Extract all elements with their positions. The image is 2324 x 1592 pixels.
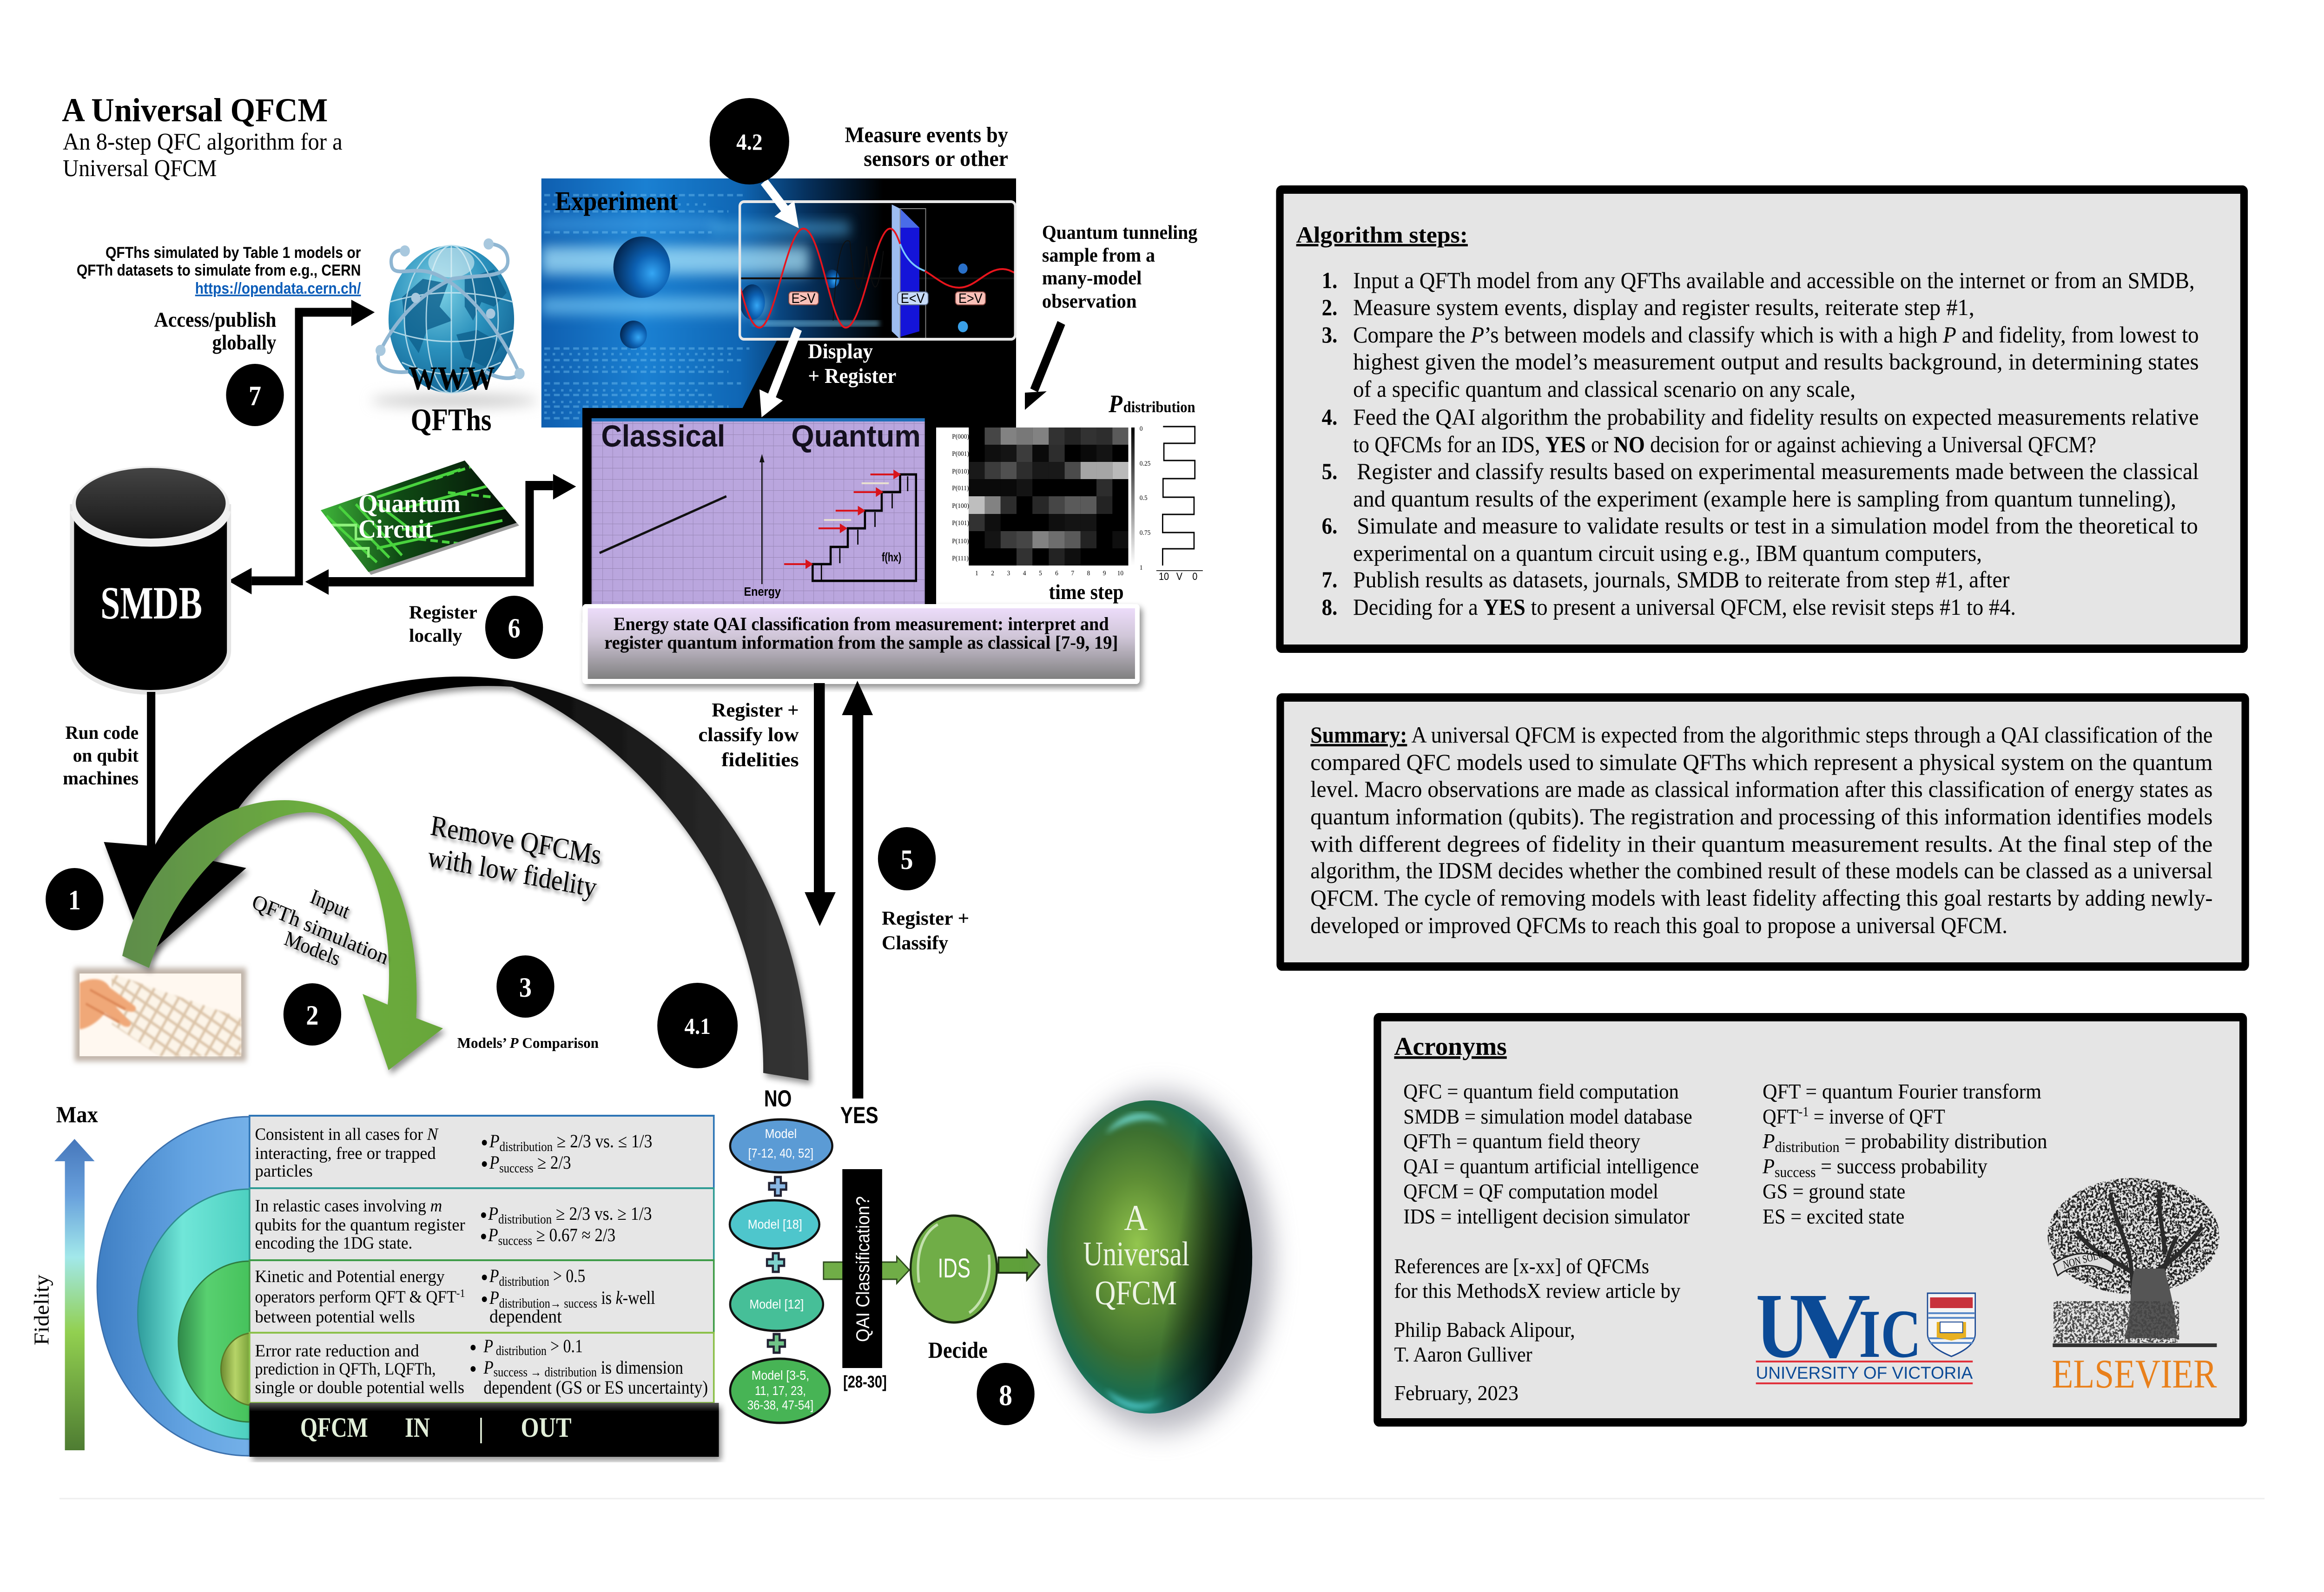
logo: UVic: U (1756, 1274, 1809, 1377)
table row: kinetic and potential energy (250, 1260, 714, 1333)
heatmap: P distribution over time step: 3 (1007, 569, 1010, 577)
curved arrow: input QFTh simulation models (122, 800, 443, 1070)
step badge 4.1 (657, 983, 738, 1068)
rotated label: remove QFCMs with low fidelity: Remove QFCMs (429, 809, 604, 871)
panel: summary: algorithm, the IDSM decides whether the combined result of these models can be classed as a universal (1310, 858, 2212, 884)
table footer: QFCM in out: QFCM (300, 1412, 368, 1443)
references and authors (1394, 1255, 1681, 1405)
table row: kinetic and potential energy: > 0.5 (549, 1266, 585, 1286)
label: register + classify (882, 907, 969, 954)
label: run code on qubit machines: Run code (66, 723, 139, 743)
banner: energy state QAI classification: register quantum information from the sample as classical [7-9, 19] (604, 632, 1118, 653)
acronym list, right column: P (1762, 1155, 1775, 1178)
rotated label: input QFTh simulation models: QFTh simulation (249, 890, 391, 969)
panel: classical vs quantum energy chart: Quantum (791, 419, 921, 454)
acronym list, right column: QFT = quantum Fourier transform (1763, 1080, 2041, 1104)
label: measure events: Measure events by (845, 122, 1008, 147)
heatmap: P distribution over time step: 0.25 (1140, 460, 1150, 467)
label: register + classify low fidelities: classify low (698, 724, 799, 745)
table row: error rate reduction: distribution (493, 1343, 547, 1358)
rotated label: remove QFCMs with low fidelity: with low fidelity (426, 840, 599, 903)
numbered list: 6. (1322, 513, 1337, 539)
chart: P distribution step plot (1108, 390, 1203, 582)
panel: summary: level. Macro observations are made as classical information after this classification of energy states as (1310, 777, 2212, 803)
table row: error rate reduction: P (483, 1336, 493, 1356)
panel: algorithm steps (1280, 190, 2244, 649)
chart: P distribution step plot: 10 (1159, 571, 1169, 582)
title block: A Universal QFCM (62, 92, 328, 129)
table row: highest fidelity: ≥ 2/3 vs. ≤ 1/3 (553, 1131, 652, 1151)
table row: kinetic and potential energy: Kinetic and Potential energy (255, 1267, 445, 1286)
table row: error rate reduction: prediction in QFTh, LQFTh, (255, 1359, 436, 1378)
icon: WWW globe (370, 238, 538, 437)
table row: realistic cases: In relastic cases involving m (255, 1196, 442, 1215)
numbered list: 8. (1322, 595, 1337, 620)
arrow: YES up to classification (842, 681, 873, 1099)
label: quantum tunneling sample: many-model (1042, 267, 1142, 289)
label: register + classify low fidelities: Register + (712, 699, 799, 721)
heatmap: P distribution over time step: 0.75 (1140, 529, 1150, 537)
label: access/publish globally: globally (212, 331, 277, 355)
table row: highest fidelity: P (489, 1131, 500, 1151)
plus icon 1 (769, 1177, 786, 1196)
acronym list, left column: QFTh = quantum field theory (1403, 1130, 1640, 1153)
step badge 4.1: 4.1 (684, 1014, 711, 1039)
table footer: QFCM in out: IN (405, 1412, 430, 1443)
label: run code on qubit machines (63, 723, 139, 789)
numbered list: Register and classify results based on experimental measurements made between the classical (1357, 459, 2199, 485)
logo: UVic: IC (1859, 1296, 1921, 1372)
box: QAI classification (842, 1169, 882, 1368)
panel: acronyms and credits: Acronyms (1394, 1033, 1507, 1061)
QFTh data source note: QFTh datasets to simulate from e.g., CERN (77, 262, 361, 279)
table row: realistic cases: ≥ 0.67 ≈ 2/3 (532, 1225, 615, 1245)
model node 3: Model [12] (749, 1297, 804, 1311)
step badge 5 (878, 827, 936, 890)
label: access/publish globally (154, 308, 277, 355)
logo: UVic: UNIVERSITY OF VICTORIA (1756, 1363, 1973, 1382)
tunneling barrier diagram: E>V (792, 291, 815, 306)
acronym list, right column (1762, 1080, 2047, 1229)
table row: highest fidelity: success (499, 1161, 533, 1175)
step badge 5: 5 (900, 844, 913, 875)
label: quantum tunneling sample: observation (1042, 290, 1137, 312)
step badge 4.2 with white arrow (710, 98, 799, 228)
panel: summary: Summary: (1310, 723, 1407, 748)
reference label: 28-30: [28-30] (843, 1373, 887, 1391)
model node 1: Model (765, 1126, 797, 1141)
heatmap: P distribution over time step: 2 (991, 569, 994, 577)
numbered list: 4. (1322, 405, 1337, 430)
table row: error rate reduction: dependent (GS or ES uncertainty) (483, 1377, 708, 1398)
heatmap: P distribution over time step: 7 (1071, 569, 1074, 577)
arrow: register and classify low fidelities (805, 683, 836, 926)
table row: realistic cases: ≥ 2/3 vs. ≥ 1/3 (552, 1204, 652, 1224)
table row: realistic cases: distribution (498, 1212, 552, 1226)
tunneling barrier diagram: E>V (958, 291, 983, 306)
table row: kinetic and potential energy: P (489, 1288, 499, 1308)
table row: kinetic and potential energy: P (489, 1266, 499, 1286)
white arrow: display to classification (759, 329, 798, 417)
chart: P distribution step plot: Pdistribution (1108, 390, 1195, 418)
acronym list, right column: -1 (1798, 1105, 1809, 1119)
disc: a universal QFCM: QFCM (1095, 1274, 1177, 1312)
heatmap: P distribution over time step: P(101) (952, 519, 969, 527)
database cylinder: SMDB: SMDB (100, 577, 202, 629)
heatmap: P distribution over time step: 8 (1087, 569, 1090, 577)
table row: highest fidelity (250, 1116, 714, 1188)
numbered list: 7. (1322, 567, 1337, 593)
icon: WWW globe: WWW (409, 360, 495, 397)
heatmap axis label: time step: time step (1049, 580, 1124, 604)
panel: classical vs quantum energy chart: Energy (744, 585, 781, 599)
arrow: tunneling sample to heatmap (1025, 323, 1061, 410)
heatmap: P distribution over time step: 0.5 (1140, 494, 1148, 502)
plus icon 3 (768, 1334, 785, 1353)
numbered list: and quantum results of the experiment (example here is sampling from quantum tunneling), (1353, 487, 2176, 512)
references and authors: for this MethodsX review article by (1394, 1279, 1681, 1303)
label: fidelity: Fidelity (31, 1275, 53, 1345)
tunneling barrier diagram: E<V (901, 291, 925, 306)
step badge 3 (496, 955, 555, 1018)
label: quantum tunneling sample (1042, 221, 1197, 312)
panel: summary: with different degrees of fidelity in their quantum measurement results. At the final step of the (1310, 832, 2212, 857)
node: IDS (911, 1216, 997, 1322)
chart: P distribution step plot: V (1176, 571, 1182, 582)
banner: energy state QAI classification: Energy state QAI classification from measurement: interpret and (614, 614, 1109, 634)
arrow: fidelity scale (54, 1139, 95, 1450)
experiment image panel: Experiment (555, 186, 678, 216)
table row: realistic cases: P (488, 1225, 498, 1245)
model node 3 (730, 1278, 823, 1331)
table row: highest fidelity: distribution (500, 1139, 553, 1154)
heatmap: P distribution over time step: 1 (1140, 564, 1143, 572)
model node 2 (730, 1200, 819, 1249)
label: measure events (845, 122, 1008, 171)
label: models P comparison: Models’ P Comparison (457, 1035, 599, 1051)
heatmap: P distribution over time step: P(011) (952, 484, 969, 492)
logo: UVic (1756, 1274, 1975, 1384)
numbered list: Compare the P’s between models and classify which is with a high P and fidelity, from lowest to (1353, 322, 2199, 348)
disc: a universal QFCM: A (1124, 1198, 1148, 1238)
acronym list, left column: SMDB = simulation model database (1403, 1105, 1692, 1129)
heatmap: P distribution over time step: 1 (975, 569, 978, 577)
table row: error rate reduction: P (483, 1357, 494, 1378)
logo: Elsevier tree and wordmark: NON SOLUS (2062, 1247, 2109, 1271)
nested half-ellipses: fidelity levels (97, 1117, 250, 1456)
label: NO: NO (764, 1086, 792, 1112)
step badge 8 (977, 1363, 1035, 1425)
label: register + classify: Classify (882, 932, 948, 954)
experiment image panel: Display (808, 340, 873, 363)
step badge 3: 3 (519, 972, 532, 1003)
acronym list, right column: ES = excited state (1763, 1205, 1904, 1229)
acronym list, right column: = success probability (1816, 1155, 1987, 1178)
table row: kinetic and potential energy: operators perform QFT & QFT (255, 1287, 448, 1306)
table row: realistic cases: success (498, 1233, 532, 1248)
step badge 8: 8 (999, 1379, 1012, 1412)
acronym list, left column (1403, 1080, 1699, 1229)
acronym list, right column: distribution (1775, 1139, 1840, 1155)
logo: Elsevier tree and wordmark: ELSEVIER (2052, 1351, 2217, 1397)
label: register + classify: Register + (882, 907, 969, 929)
panel: summary: compared QFC models used to simulate QFThs which represent a physical system on the quantum (1310, 750, 2212, 776)
box: QAI classification: QAI Classification? (852, 1196, 873, 1342)
arrow: circuit to classification panel (305, 474, 576, 595)
table row: realistic cases (250, 1188, 714, 1260)
label: register + classify low fidelities (698, 699, 799, 770)
step badge 1 (46, 868, 103, 930)
heatmap: P distribution over time step: P(010) (952, 467, 969, 475)
table row: kinetic and potential energy: -1 (456, 1287, 465, 1299)
acronym list, right column: GS = ground state (1763, 1180, 1905, 1204)
acronym list, left column: QAI = quantum artificial intelligence (1403, 1155, 1699, 1178)
acronym list, left column: QFC = quantum field computation (1403, 1080, 1679, 1104)
model node 4: 11, 17, 23, (755, 1383, 806, 1398)
table row: error rate reduction: success → distribution (494, 1365, 597, 1379)
label: YES: YES (840, 1103, 878, 1129)
logo: Elsevier tree and wordmark (2048, 1178, 2219, 1397)
label: measure events: sensors or other (864, 146, 1008, 171)
heatmap: P distribution over time step (952, 425, 1150, 577)
panel: summary: developed or improved QFCMs to reach this goal to propose a universal QFCM. (1310, 913, 2007, 939)
heatmap: P distribution over time step: P(100) (952, 502, 969, 510)
numbered list (1322, 268, 2199, 620)
panel: classical vs quantum energy chart: f(hx) (882, 551, 901, 564)
curved arrow: remove QFCMs with low fidelity (104, 677, 808, 1080)
heatmap: P distribution over time step: 5 (1039, 569, 1042, 577)
panel: classical vs quantum energy chart (582, 408, 936, 623)
banner: energy state QAI classification (582, 604, 1140, 684)
table row: kinetic and potential energy: distribution (499, 1274, 549, 1289)
panel: summary: A universal QFCM is expected from the algorithmic steps through a QAI classification of the (1411, 723, 2212, 748)
label: register locally (409, 602, 477, 646)
numbered list: Simulate and measure to validate results or test in a simulation model from the theoretical to (1357, 513, 2198, 539)
numbered list: 3. (1322, 322, 1337, 348)
table row: highest fidelity: particles (255, 1161, 313, 1180)
model node 4 (730, 1359, 830, 1423)
step badge 6 (485, 596, 543, 659)
heatmap: P distribution over time step: 0 (1140, 425, 1143, 433)
step badge 7: 7 (249, 381, 261, 412)
table row: highest fidelity: P (489, 1152, 499, 1173)
numbered list: highest given the model’s measurement output and results background, in determining states (1353, 349, 2199, 375)
numbered list: Publish results as datasets, journals, SMDB to reiterate from step #1, after (1353, 567, 2010, 593)
experiment image panel: + Register (808, 364, 896, 388)
numbered list: Measure system events, display and register results, reiterate step #1, (1353, 295, 1974, 321)
numbered list: Input a QFTh model from any QFThs available and accessible on the internet or from an SMDB, (1353, 268, 2195, 294)
title block: An 8-step QFC algorithm for a (63, 128, 343, 155)
step badge 4.2 with white arrow: 4.2 (736, 130, 762, 155)
table row: error rate reduction: is dimension (597, 1357, 683, 1378)
table row: highest fidelity: Consistent in all cases for N (255, 1125, 439, 1144)
table row: kinetic and potential energy: is (597, 1288, 616, 1308)
table row: kinetic and potential energy: dependent (489, 1306, 562, 1327)
node: IDS: IDS (938, 1253, 971, 1283)
table row: kinetic and potential energy: distribution→ success (499, 1296, 597, 1310)
numbered list: 5. (1322, 459, 1337, 485)
numbered list: Deciding for a YES to present a universal QFCM, else revisit steps #1 to #4. (1353, 595, 2016, 620)
label: access/publish globally: Access/publish (154, 308, 276, 332)
numbered list: of a specific quantum and classical scenario on any scale, (1353, 377, 1855, 402)
logo: UVic: V (1795, 1274, 1871, 1377)
model node 4: 36-38, 47-54] (747, 1398, 813, 1412)
table footer: QFCM in out: OUT (521, 1412, 572, 1443)
title block: Universal QFCM (63, 155, 217, 182)
acronym list, left column: IDS = intelligent decision simulator (1403, 1205, 1690, 1229)
rotated label: input QFTh simulation models: Input (307, 885, 353, 923)
heatmap: P distribution over time step: 9 (1103, 569, 1106, 577)
label: run code on qubit machines: machines (63, 768, 139, 789)
label: quantum tunneling sample: Quantum tunneling (1042, 221, 1197, 243)
table row: error rate reduction: > 0.1 (547, 1336, 583, 1356)
heatmap: P distribution over time step: P(000) (952, 433, 969, 441)
numbered list: to QFCMs for an IDS, YES or NO decision for or against achieving a Universal QFCM? (1353, 432, 2096, 458)
arrow: SMDB down to keyboard (147, 692, 155, 850)
table row: realistic cases: qubits for the quantum register (255, 1215, 465, 1234)
disc: a universal QFCM: Universal (1083, 1235, 1189, 1273)
label: quantum tunneling sample: sample from a (1042, 244, 1155, 266)
numbered list: experimental on a quantum circuit using e.g., IBM quantum computers, (1353, 541, 1982, 566)
QFTh data source note (77, 244, 361, 297)
acronym list, right column: QFT (1763, 1105, 1799, 1129)
chart: P distribution step plot: 0 (1192, 571, 1197, 582)
panel: acronyms and credits (1377, 1017, 2243, 1422)
rotated label: remove QFCMs with low fidelity (426, 809, 604, 903)
plus icon 2 (767, 1253, 784, 1272)
step badge 2 (284, 983, 341, 1046)
table row: realistic cases: P (488, 1204, 498, 1224)
step badge 7 (226, 364, 284, 426)
model node 1 (730, 1119, 832, 1172)
QFTh data source note: QFThs simulated by Table 1 models or (106, 244, 361, 261)
numbered list: 1. (1322, 268, 1337, 294)
heatmap: P distribution over time step: P(110) (952, 537, 969, 545)
panel: summary: quantum information (qubits). The registration and processing of this information identifies models (1310, 804, 2212, 830)
icon: quantum circuit board (321, 460, 519, 575)
arrow: IDS to universal QFCM (998, 1250, 1040, 1280)
table row: kinetic and potential energy: between potential wells (255, 1307, 415, 1326)
references and authors: February, 2023 (1394, 1381, 1519, 1405)
acronym list, right column: P (1762, 1130, 1775, 1153)
acronym list, right column: = inverse of QFT (1809, 1105, 1945, 1129)
icon: WWW globe: QFThs (411, 402, 491, 437)
title block (62, 92, 343, 182)
table footer: QFCM in out (250, 1403, 719, 1457)
tunneling barrier diagram (740, 202, 1016, 339)
model node 2: Model [18] (748, 1217, 802, 1231)
acronym list, right column: = probability distribution (1840, 1130, 2047, 1153)
heatmap: P distribution over time step: 4 (1023, 569, 1026, 577)
heatmap: P distribution over time step: P(111) (952, 554, 969, 562)
table row: realistic cases: encoding the 1DG state. (255, 1233, 412, 1252)
icon: quantum circuit board: Quantum (358, 489, 461, 518)
table row: highest fidelity: interacting, free or trapped (255, 1144, 436, 1163)
label: max: Max (56, 1102, 98, 1128)
references and authors: References are [x-xx] of QFCMs (1394, 1255, 1649, 1278)
step badge 1: 1 (68, 885, 81, 916)
table row: highest fidelity: ≥ 2/3 (533, 1152, 571, 1173)
references and authors: Philip Baback Alipour, (1394, 1318, 1575, 1342)
references and authors: T. Aaron Gulliver (1394, 1343, 1532, 1367)
acronym list, right column: success (1775, 1164, 1816, 1180)
keyboard image (74, 968, 246, 1061)
model node 1: [7-12, 40, 52] (748, 1146, 813, 1160)
arrow: SMDB to WWW (228, 300, 375, 594)
label: register + classify low fidelities: fidelities (721, 749, 799, 770)
model node 4: Model [3-5, (752, 1368, 809, 1382)
panel: algorithm steps: Algorithm steps: (1296, 223, 1468, 248)
label: run code on qubit machines: on qubit (73, 745, 139, 766)
numbered list: Feed the QAI algorithm the probability and fidelity results on expected measurements relative (1353, 405, 2199, 430)
acronym list, left column: QFCM = QF computation model (1403, 1180, 1658, 1204)
label: decide: Decide (928, 1338, 988, 1363)
experiment image panel (541, 178, 1016, 428)
icon: quantum circuit board: Circuit (358, 515, 433, 544)
heatmap: P distribution over time step: 10 (1117, 569, 1123, 577)
database cylinder: SMDB (72, 466, 230, 692)
label: register locally: locally (409, 625, 462, 646)
panel: summary (1280, 697, 2245, 967)
heatmap: P distribution over time step: P(001) (952, 450, 969, 458)
heatmap: P distribution over time step: 6 (1055, 569, 1058, 577)
table row: error rate reduction: Error rate reduction and (255, 1341, 419, 1360)
arrow: models to IDS (824, 1256, 909, 1283)
table row: error rate reduction (250, 1333, 714, 1403)
numbered list: 2. (1322, 295, 1337, 321)
rotated label: input QFTh simulation models: Models (282, 927, 343, 971)
panel: classical vs quantum energy chart: Classical (601, 419, 725, 454)
disc: a universal QFCM (1047, 1092, 1273, 1431)
step badge 2: 2 (306, 1000, 318, 1031)
QFTh data source note: https://opendata.cern.ch/ (195, 280, 361, 297)
panel: summary: QFCM. The cycle of removing models with least fidelity affecting this goal restarts by adding newly- (1310, 886, 2212, 911)
label: register locally: Register (409, 602, 477, 623)
step badge 6: 6 (508, 613, 521, 644)
table row: kinetic and potential energy: k-well (616, 1288, 657, 1308)
table row: error rate reduction: single or double potential wells (255, 1378, 464, 1397)
